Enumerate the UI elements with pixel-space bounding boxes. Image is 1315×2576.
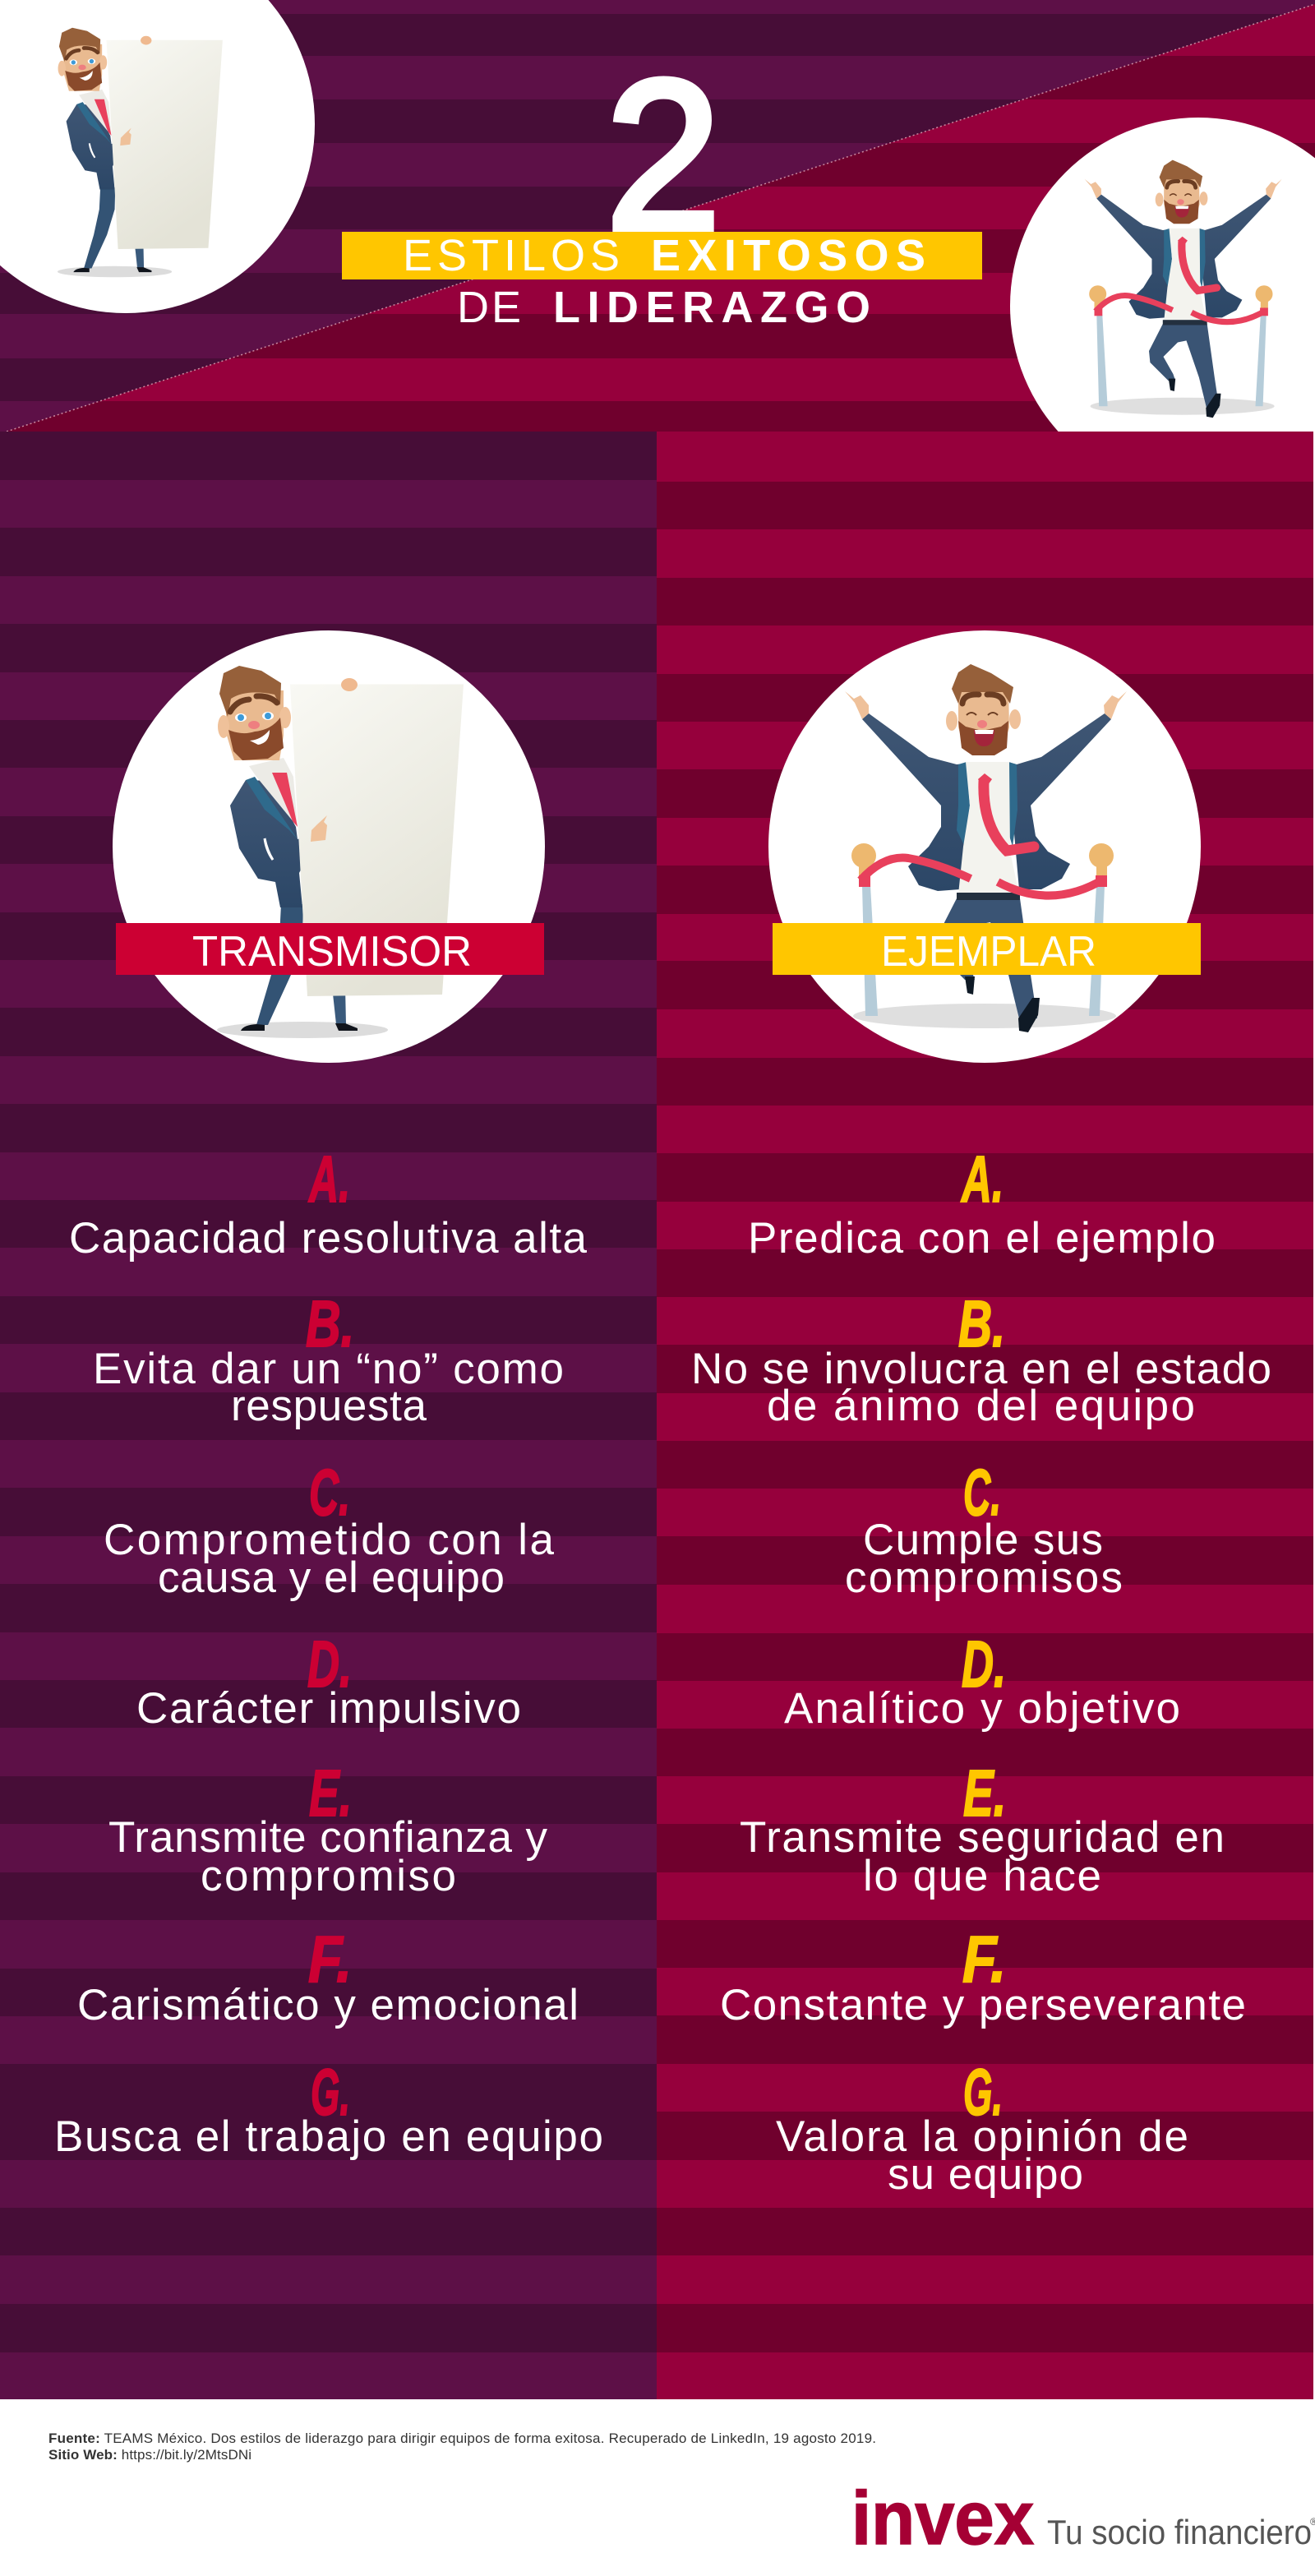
item B: respuesta	[231, 1382, 427, 1430]
ejemplar circle and figure	[768, 630, 1201, 1063]
header panel	[0, 0, 1315, 432]
item B: No se involucra en el estado	[691, 1345, 1271, 1393]
ejemplar banner	[773, 923, 1201, 976]
item B: Evita dar un “no” como	[93, 1345, 564, 1393]
footer sources	[48, 2431, 876, 2463]
item C: compromisos	[845, 1553, 1123, 1602]
item G: G.	[963, 2056, 1003, 2129]
title second line: DE	[457, 283, 521, 332]
transmisor banner	[116, 923, 544, 976]
item A	[748, 1143, 1216, 1263]
column: transmisor	[0, 432, 657, 2399]
item F: Carismático y emocional	[77, 1981, 579, 2029]
invex logo: invex	[851, 2477, 1034, 2560]
item D: D.	[307, 1627, 352, 1701]
item E: compromiso	[201, 1852, 456, 1900]
item E: Transmite seguridad en	[740, 1813, 1225, 1862]
item G: su equipo	[888, 2150, 1083, 2199]
item F: F.	[308, 1923, 352, 1996]
big number 2: 2	[606, 35, 721, 276]
item A: Capacidad resolutiva alta	[69, 1214, 588, 1263]
item E: E.	[963, 1757, 1006, 1830]
item A: A.	[961, 1143, 1004, 1216]
item G: Valora la opinión de	[776, 2112, 1188, 2161]
title banner: ESTILOS	[403, 231, 620, 280]
item F: F.	[962, 1923, 1006, 1996]
item G	[54, 2056, 603, 2161]
item B	[93, 1287, 564, 1430]
item E	[740, 1757, 1225, 1900]
item B: B.	[958, 1287, 1005, 1360]
footer sources: Sitio Web: https://bit.ly/2MtsDNi	[48, 2447, 251, 2463]
item G: Busca el trabajo en equipo	[54, 2112, 603, 2161]
item A: Predica con el ejemplo	[748, 1214, 1216, 1263]
title banner	[342, 231, 982, 280]
header circle with ejemplar figure	[1010, 118, 1315, 432]
item B: de ánimo del equipo	[767, 1382, 1195, 1430]
item D: D.	[962, 1627, 1006, 1701]
item D	[136, 1627, 521, 1733]
item C: C.	[309, 1456, 350, 1529]
item G: G.	[311, 2056, 350, 2129]
item D: Carácter impulsivo	[136, 1684, 521, 1733]
title banner: EXITOSOS	[651, 231, 925, 280]
item E: lo que hace	[863, 1852, 1101, 1900]
invex logo	[851, 2477, 1315, 2560]
transmisor circle and figure	[113, 630, 545, 1063]
item E: Transmite confianza y	[108, 1813, 547, 1862]
item E	[108, 1757, 547, 1900]
ejemplar banner: EJEMPLAR	[881, 928, 1096, 976]
item F	[77, 1923, 579, 2029]
item C: Comprometido con la	[104, 1516, 555, 1564]
header circle with transmisor figure	[0, 0, 315, 313]
item C	[845, 1456, 1123, 1602]
item E: E.	[309, 1757, 352, 1830]
item A: A.	[308, 1143, 350, 1216]
item A	[69, 1143, 588, 1263]
item C	[104, 1456, 555, 1602]
item B	[691, 1287, 1271, 1430]
item F: Constante y perseverante	[720, 1981, 1246, 2029]
footer sources: Fuente: TEAMS México. Dos estilos de liderazgo para dirigir equipos de forma exitosa. Recuperado de LinkedIn, 19 agosto 2019.	[48, 2431, 876, 2446]
item C: C.	[963, 1456, 1001, 1529]
column: ejemplar	[657, 432, 1313, 2399]
item C: causa y el equipo	[158, 1553, 505, 1602]
item F	[720, 1923, 1246, 2029]
item C: Cumple sus	[863, 1516, 1103, 1564]
item B: B.	[306, 1287, 354, 1360]
item D	[784, 1627, 1180, 1733]
transmisor banner: TRANSMISOR	[192, 928, 472, 976]
item D: Analítico y objetivo	[784, 1684, 1180, 1733]
item G	[776, 2056, 1188, 2199]
title second line: LIDERAZGO	[553, 283, 870, 332]
